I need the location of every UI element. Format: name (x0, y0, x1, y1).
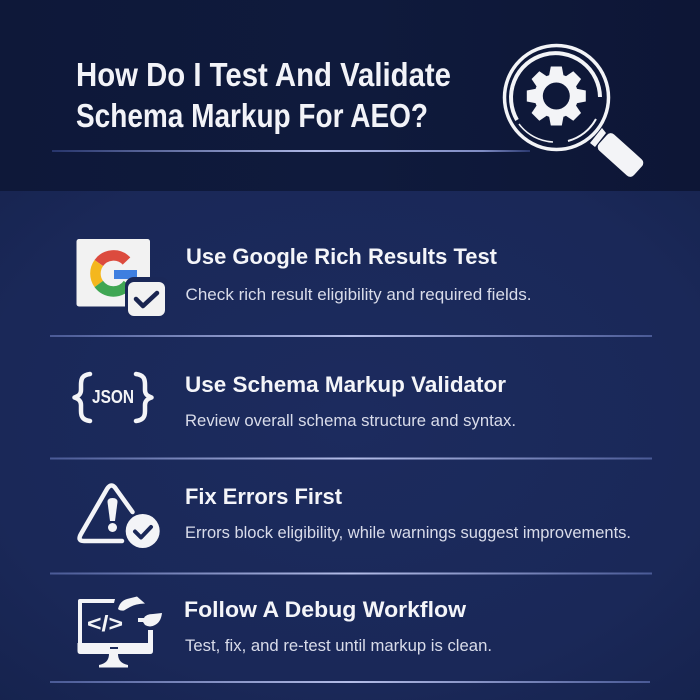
heading: Fix Errors First (185, 484, 342, 509)
heading: Follow A Debug Workflow (184, 597, 466, 622)
icon: JSON braces: JSON (92, 387, 134, 407)
icon: JSON braces (74, 374, 152, 421)
description: Check rich result eligibility and required fields. (186, 286, 532, 304)
title (76, 56, 451, 134)
item 1: Google Rich Results Test (76, 239, 532, 319)
icon: monitor with code and arrows: </> (87, 611, 123, 636)
title: Schema Markup For AEO? (76, 97, 428, 134)
heading: Use Schema Markup Validator (185, 372, 506, 397)
title: How Do I Test And Validate (76, 56, 451, 93)
body background (0, 191, 700, 700)
description: Errors block eligibility, while warnings suggest improvements. (185, 524, 631, 542)
icon: magnifying glass with gear (504, 46, 645, 179)
item 2: Use Schema Markup Validator (74, 372, 516, 430)
description: Test, fix, and re-test until markup is clean. (185, 637, 492, 655)
description: Review overall schema structure and syntax. (185, 412, 516, 430)
heading: Use Google Rich Results Test (186, 244, 497, 269)
icon: monitor with code and arrows (78, 596, 162, 668)
item 4: Follow A Debug Workflow (78, 596, 492, 668)
icon: warning triangle with check (80, 486, 160, 548)
item 3: Fix Errors First (80, 484, 631, 548)
header band (0, 0, 700, 191)
icon: Google card with checkmark (76, 239, 169, 319)
